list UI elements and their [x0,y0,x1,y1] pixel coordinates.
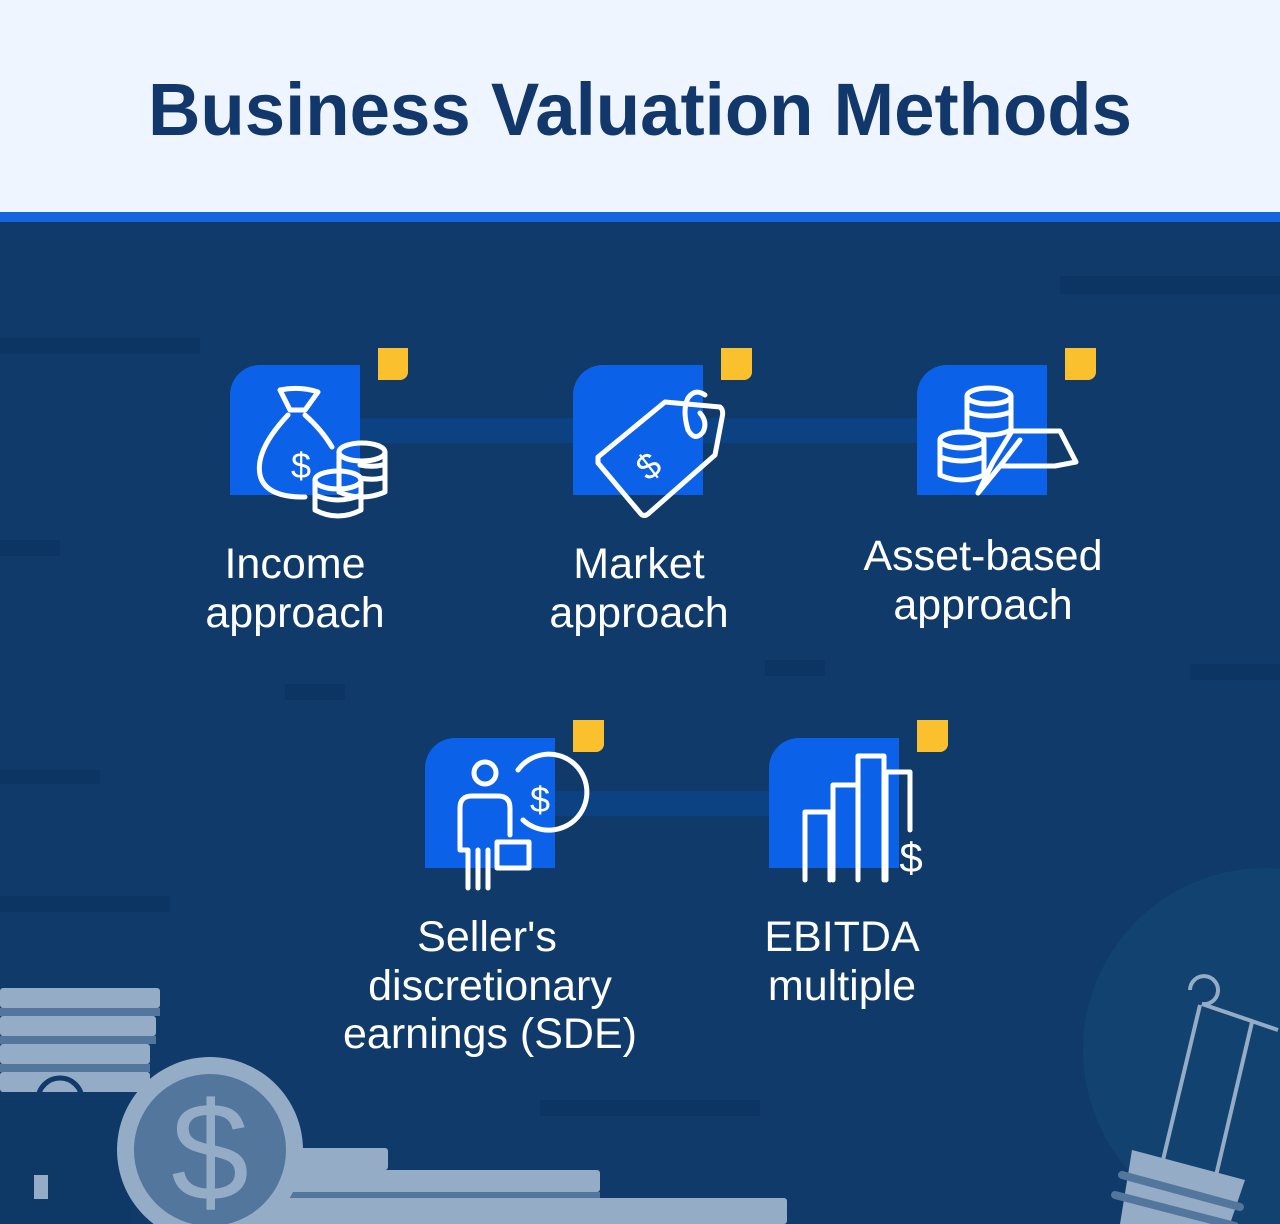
method: EBITDA multiple: EBITDA [764,913,920,961]
header band [0,0,1280,222]
method: EBITDA multiple [764,720,948,1010]
decoration: light bulb [1083,868,1280,1224]
method: asset-based approach [863,348,1103,629]
title: Business Valuation Methods [148,68,1132,151]
method: income approach: approach [205,589,385,637]
method: market approach: approach [549,589,729,637]
decoration: money stacks and coin [0,988,787,1224]
label: Income [224,540,366,588]
method: income approach: $ [291,445,311,486]
method: seller's discretionary earnings: $ [530,779,550,820]
method: seller's discretionary earnings [343,720,637,1058]
method: seller's discretionary earnings: Seller's [417,913,557,961]
method: income approach [205,348,408,637]
method: market approach: $ [628,444,669,488]
method: asset-based approach: approach [893,581,1073,629]
method: EBITDA multiple: $ [899,834,923,881]
method: asset-based approach: Asset-based [863,532,1103,580]
method: market approach: Market [573,540,705,588]
connector bands [360,418,917,816]
method: seller's discretionary earnings: earnings (SDE) [343,1010,637,1058]
background decorative streaks [0,276,1280,1116]
method: market approach [549,348,752,637]
method: seller's discretionary earnings: discretionary [368,962,612,1010]
method: EBITDA multiple: multiple [768,962,916,1010]
